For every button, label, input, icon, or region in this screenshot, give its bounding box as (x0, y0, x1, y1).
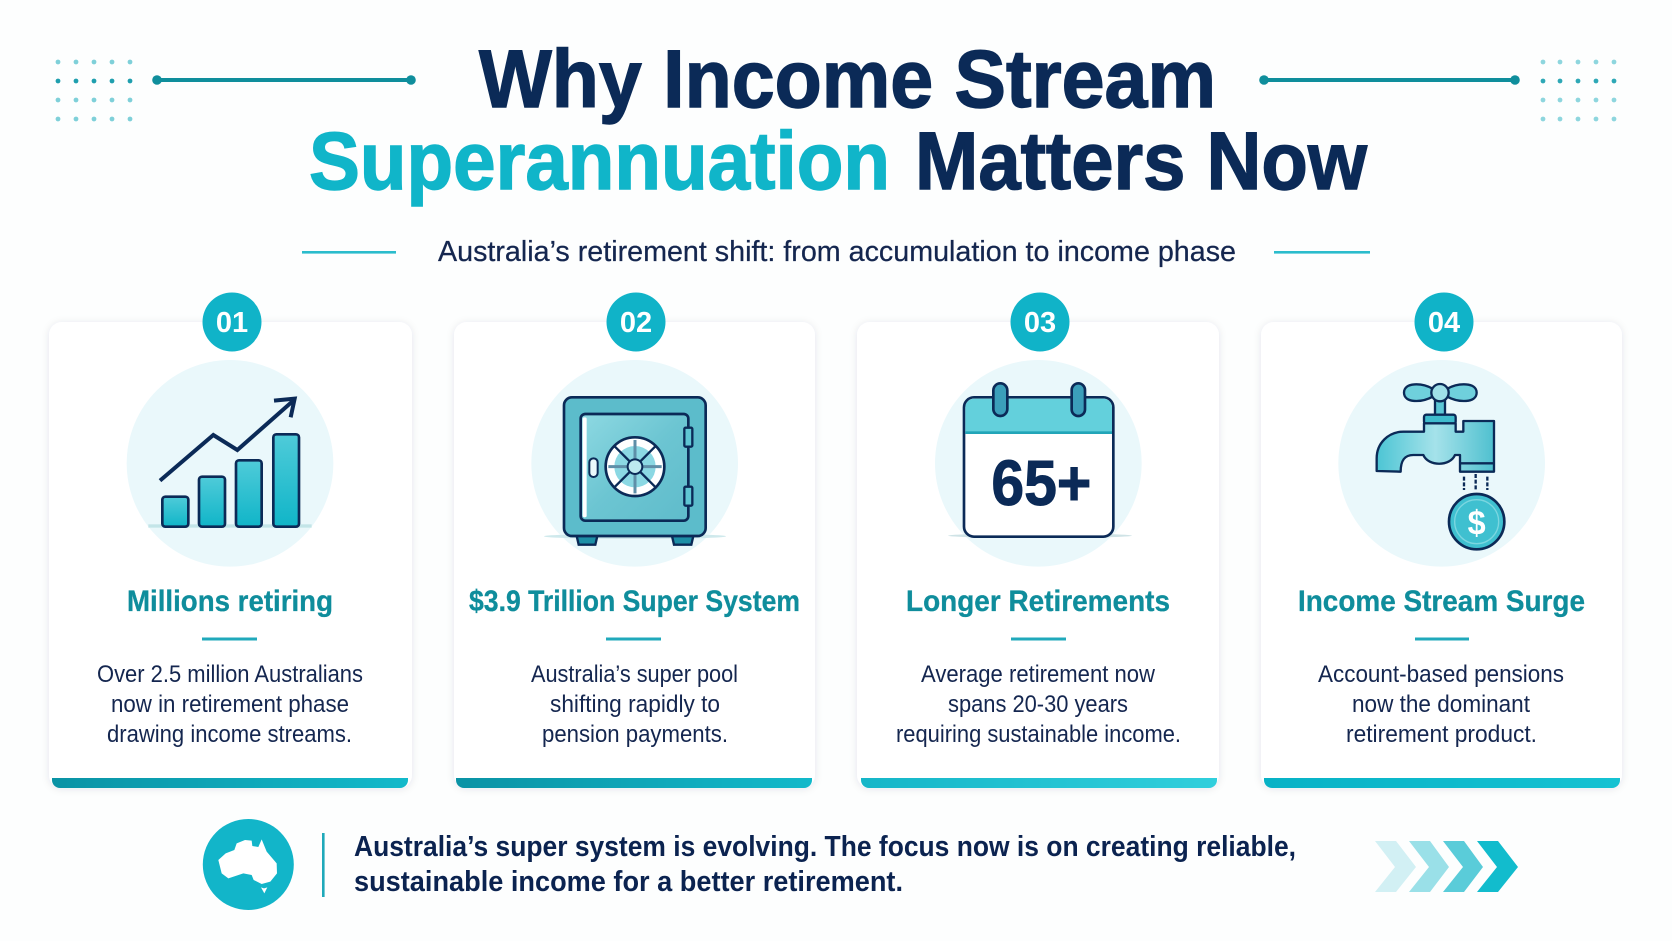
title: Matters Now (915, 116, 1367, 207)
body text: Australia’s super pool (531, 661, 738, 688)
badge 01 (202, 292, 262, 352)
title: Superannuation (309, 116, 890, 207)
title (309, 34, 1367, 207)
body text: requiring sustainable income. (896, 721, 1181, 748)
icon: Australia map in circle (203, 819, 294, 910)
body text: shifting rapidly to (550, 691, 720, 718)
body text (896, 661, 1181, 748)
heading: Longer Retirements (906, 585, 1170, 618)
body text (97, 661, 363, 748)
body text: now the dominant (1352, 691, 1530, 718)
decorative dots: top right (1541, 60, 1616, 121)
badge 04 (1414, 292, 1474, 352)
body text: spans 20-30 years (948, 691, 1128, 718)
badge 02 (606, 292, 666, 352)
footer divider (322, 833, 325, 897)
subtitle: Australia’s retirement shift: from accumulation to income phase (438, 236, 1236, 268)
footer message: sustainable income for a better retirement. (354, 866, 903, 898)
panel: card 03 Longer Retirements (857, 292, 1219, 788)
body text: drawing income streams. (107, 721, 352, 748)
body text: pension payments. (542, 721, 728, 748)
icon: tap dripping dollar coin: $ (1468, 504, 1486, 542)
heading: Income Stream Surge (1298, 585, 1585, 618)
body text: Average retirement now (921, 661, 1156, 688)
header rule: left (152, 75, 416, 85)
icon: calendar 65+ (935, 360, 1142, 567)
badge 02: 02 (620, 307, 652, 339)
panel: card 02 $3.9 Trillion Super System (454, 292, 815, 788)
badge 03 (1010, 292, 1070, 352)
badge 03: 03 (1024, 307, 1056, 339)
decorative dots: top left (56, 60, 132, 121)
panel: card 04 Income Stream Surge (1261, 292, 1622, 788)
footer message: Australia’s super system is evolving. The focus now is on creating reliable, (354, 831, 1296, 863)
body text: now in retirement phase (111, 691, 349, 718)
body text (1318, 661, 1564, 748)
badge 04: 04 (1428, 307, 1460, 339)
panel: card 01 Millions retiring (49, 292, 412, 788)
arrow: chevrons (1375, 841, 1518, 892)
icon: tap dripping dollar coin (1338, 360, 1545, 567)
icon: safe (531, 360, 738, 567)
icon: calendar 65+: 65+ (991, 447, 1091, 519)
body text (531, 661, 738, 748)
body text: Over 2.5 million Australians (97, 661, 363, 688)
body text: Account-based pensions (1318, 661, 1564, 688)
header rule: right (1259, 75, 1520, 85)
icon: rising bar chart with arrow (127, 360, 333, 567)
heading: Millions retiring (127, 585, 333, 618)
footer message (354, 831, 1296, 898)
title: Why Income Stream (479, 34, 1216, 125)
heading: $3.9 Trillion Super System (469, 585, 800, 618)
body text: retirement product. (1346, 721, 1537, 748)
badge 01: 01 (216, 307, 248, 339)
